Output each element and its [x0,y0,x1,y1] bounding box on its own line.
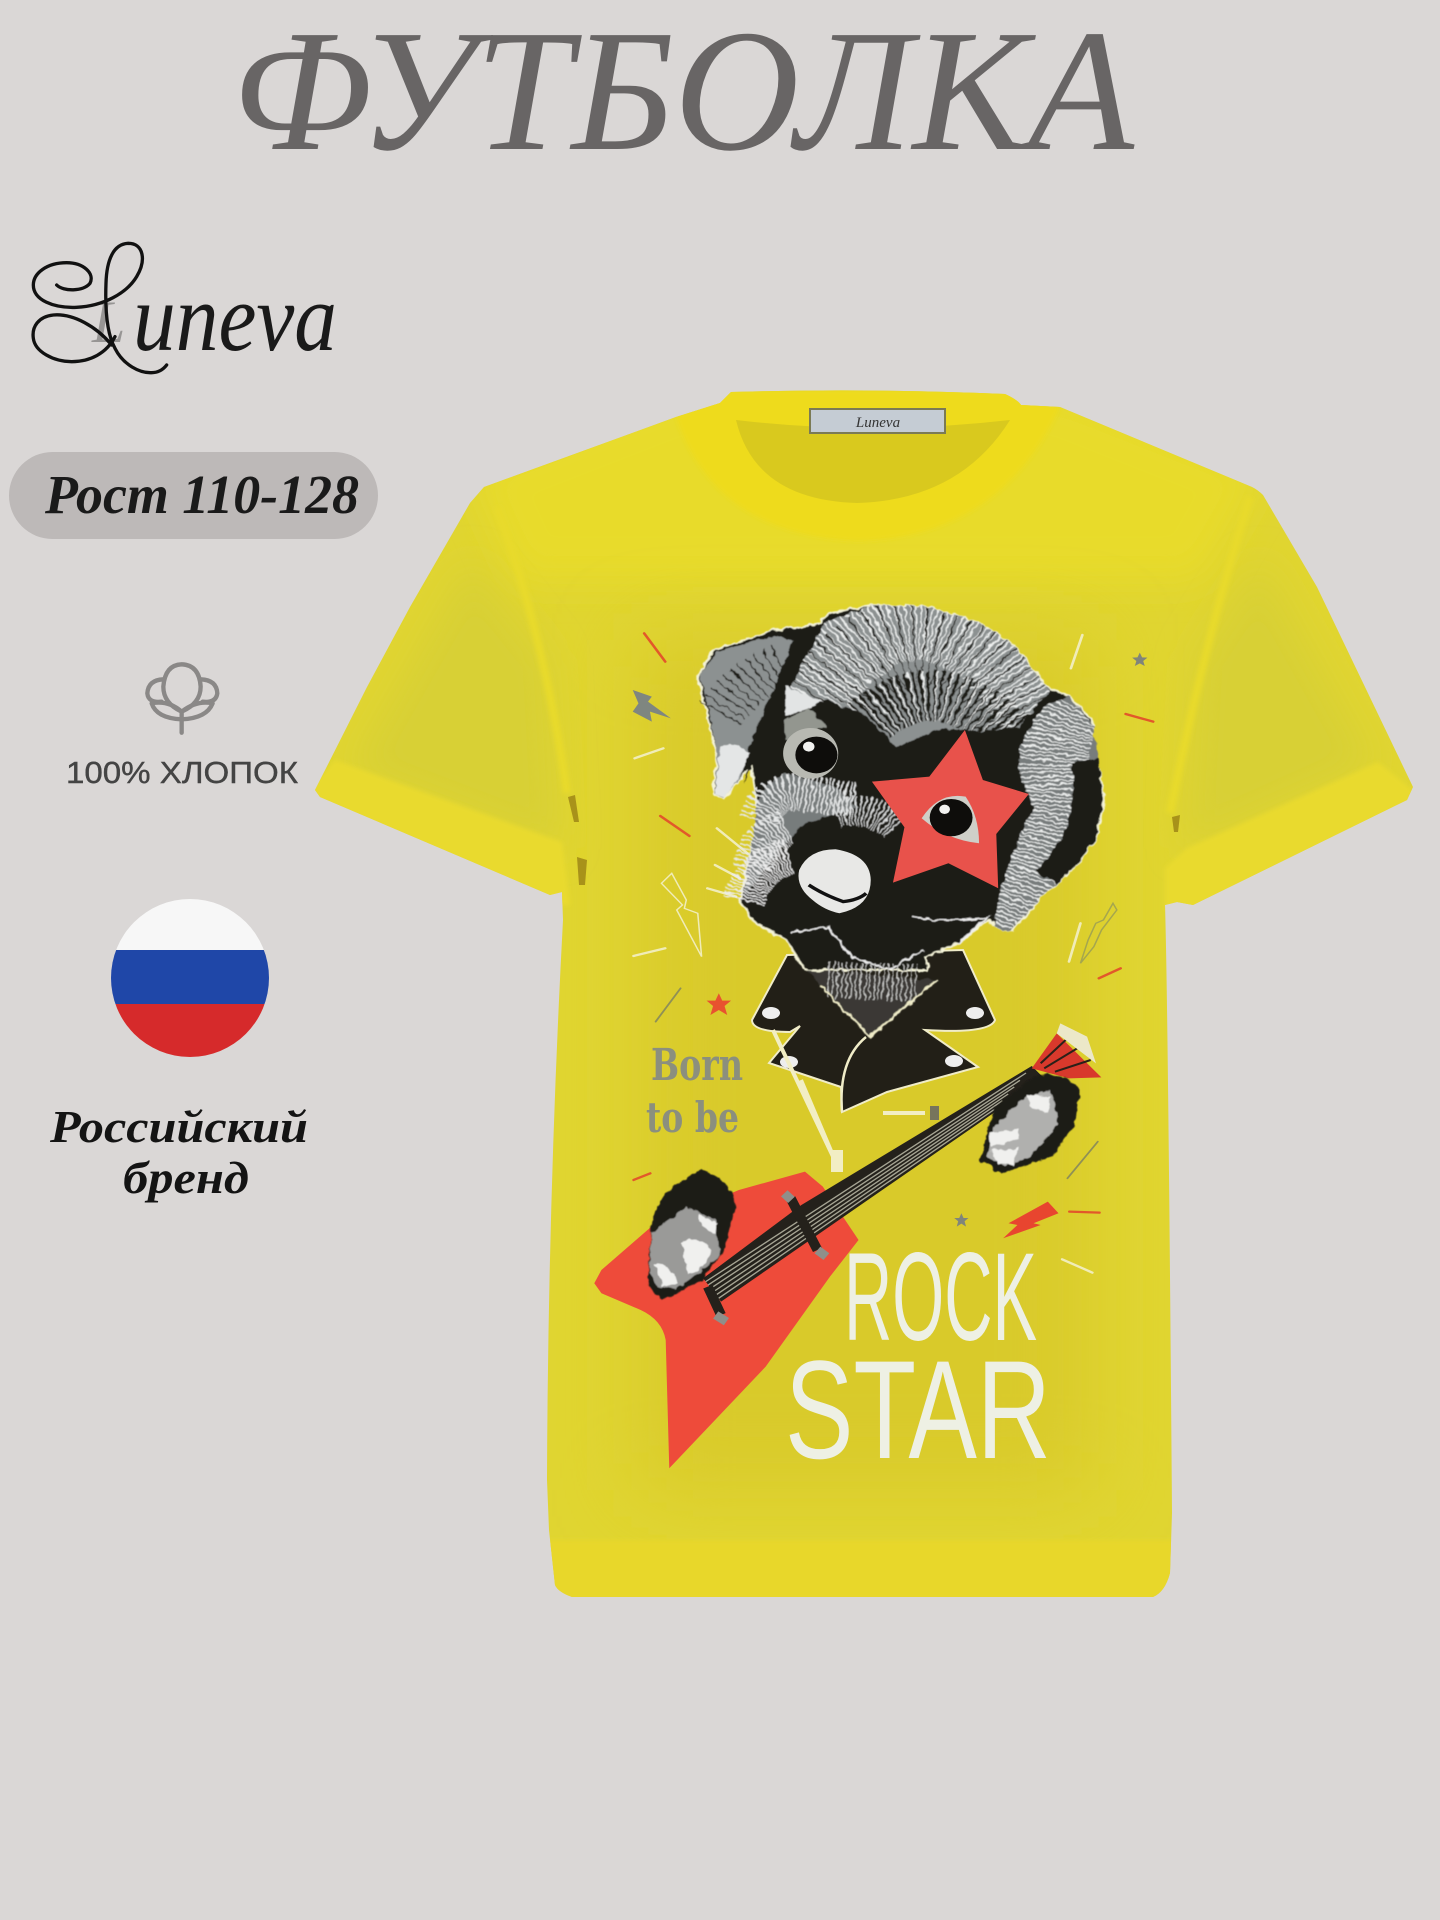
shoulder yoke shading [469,390,1264,504]
icon: cotton boll [147,664,217,733]
guitar [594,1023,1101,1468]
brand origin caption: Российский [49,1101,308,1152]
forehead patch [786,687,824,717]
right sleeve hem [1165,762,1425,915]
star eye [922,796,979,843]
neck fur strands [828,980,916,983]
hands [648,1075,1080,1300]
yellow t-shirt [300,380,1430,1610]
star eye patch [872,730,1029,888]
head stripes [1041,1037,1091,1072]
lapel lines [820,980,937,1037]
chin strands [790,917,989,970]
collar band [676,390,1060,541]
print text: born to be: Born [651,1040,743,1091]
zipper [773,1030,925,1165]
ear strands dark [721,663,786,713]
head tip [1057,1023,1096,1063]
nose [798,849,871,913]
brand logo [33,243,337,373]
sleeve seams [520,562,1232,810]
dog face details [783,728,1029,913]
print text: rock star [785,1228,1051,1488]
neck fur base [807,970,937,1037]
cheek fur strands [759,792,855,820]
size badge: Рост 110-128 [44,464,359,525]
dog fur layer [698,600,1111,1037]
print text: rock star: ROCK [844,1228,1037,1367]
ear tip [715,744,749,797]
neck opening [736,420,1010,503]
brand origin caption: бренд [123,1152,249,1203]
brand logo: uneva [133,264,337,371]
guitar head [1032,1033,1101,1078]
left sleeve hem [300,760,570,905]
print jacket [752,950,995,1172]
brand origin caption [49,1101,308,1203]
muzzle fur upper [836,810,897,827]
icon: russian flag [111,899,269,1057]
size badge [9,452,378,539]
lower decorations [634,1142,1100,1273]
print text: rock star: STAR [785,1331,1051,1488]
right hand [980,1075,1080,1173]
brand logo: L [91,289,125,355]
underarm fold left [568,795,587,885]
snout fur [744,857,790,900]
shirt base [300,380,1430,1610]
bottom hem [540,1540,1180,1600]
sleeve shading [350,560,1375,850]
print text: born to be: to be [646,1093,739,1142]
head silhouette [698,605,1105,970]
left ear [700,636,793,797]
cheek fur base [744,773,859,897]
material label: 100% ХЛОПОК [66,755,298,790]
crown fur [789,604,1050,748]
neck label [810,409,945,433]
eye left [783,728,838,779]
guitar strings [706,1073,1026,1298]
cheek fur strands lower [753,827,786,867]
centre print shading [666,672,1064,1465]
bridge ends [716,1193,826,1322]
product card [9,34,1413,1597]
lapel overlap line [842,1037,866,1112]
bridge [708,1198,817,1315]
underarm fold right [1172,815,1180,832]
neck label: Luneva [855,415,900,431]
left hand [648,1170,735,1300]
right ear fur [994,695,1103,932]
dog head [698,600,1111,1037]
guitar body [594,1172,859,1468]
print decorations upper [633,633,1153,1022]
grey eye patch [784,708,828,740]
ear inner shadow [744,638,793,783]
print text: born to be [646,1040,743,1142]
guitar neck [703,1066,1044,1302]
